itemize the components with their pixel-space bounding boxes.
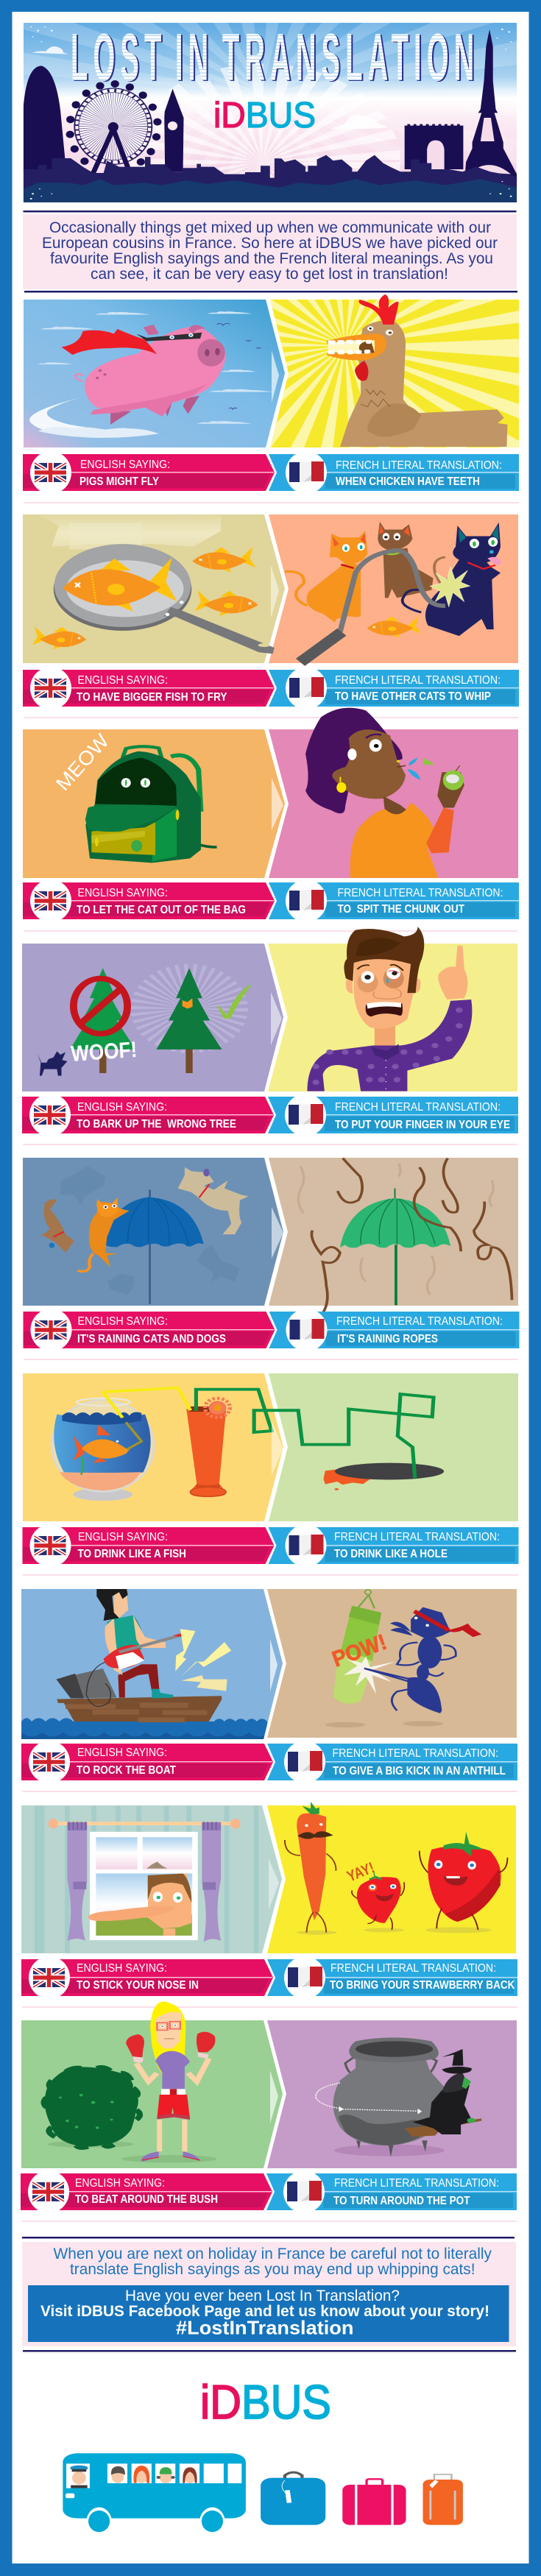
English saying: IT'S RAINING CATS AND DOGS: [77, 1333, 226, 1345]
title: LOST IN TRANSLATION: [71, 20, 479, 95]
English label: ENGLISH SAYING:: [77, 1747, 167, 1759]
French label: FRENCH LITERAL TRANSLATION:: [330, 1962, 496, 1975]
English saying: TO DRINK LIKE A FISH: [78, 1548, 186, 1560]
barking dog and trees: [38, 968, 250, 1076]
woof text: WOOF!: [70, 1038, 138, 1066]
English label: ENGLISH SAYING:: [78, 674, 168, 687]
bush and boxer: [44, 2001, 217, 2163]
caption 9: [21, 2170, 517, 2213]
caption 8: [21, 1956, 517, 1999]
bendy straw and hole: [196, 1390, 444, 1490]
woman spitting: [305, 708, 464, 878]
intro line 3: favourite English sayings and the French literal meanings. As you: [50, 250, 493, 267]
rule: [24, 291, 517, 293]
English label: ENGLISH SAYING:: [77, 1962, 167, 1975]
flying pig: [29, 311, 273, 438]
left background: [23, 1158, 283, 1306]
facebook text: Visit iDBUS Facebook Page and let us know about your story!: [40, 2303, 489, 2320]
French label: FRENCH LITERAL TRANSLATION:: [336, 1315, 503, 1328]
scene 2: bigger fish to fry: [23, 514, 518, 663]
intro line 4: can see, it can be very easy to get lost in translation!: [91, 266, 448, 283]
caption band with flags: [21, 1956, 517, 1999]
left background: [23, 729, 285, 878]
caption band with flags: [23, 667, 519, 710]
right background: [270, 300, 519, 447]
scene 8: nose and strawberries: [21, 1802, 516, 1953]
caption 3: [23, 880, 519, 922]
question text: Have you ever been Lost In Translation?: [125, 2287, 400, 2304]
iDBUS logo: iDBUS: [213, 96, 316, 135]
French translation: TO TURN AROUND THE POT: [333, 2195, 470, 2207]
French translation: TO PUT YOUR FINGER IN YOUR EYE: [335, 1119, 510, 1131]
divider: [23, 1144, 517, 1145]
icon: orange trolley case: [423, 2474, 463, 2525]
chevron highlight: [271, 992, 282, 1045]
English label: ENGLISH SAYING:: [80, 459, 170, 471]
caption 4: [22, 1094, 518, 1136]
English saying: TO BEAT AROUND THE BUSH: [75, 2193, 218, 2206]
bus and luggage: [63, 2453, 463, 2537]
French translation: TO SPIT THE CHUNK OUT: [337, 903, 464, 916]
French translation: IT'S RAINING ROPES: [337, 1333, 438, 1345]
right background: [267, 2020, 517, 2168]
hashtag: #LostInTranslation: [176, 2317, 353, 2339]
French translation: TO DRINK LIKE A HOLE: [334, 1548, 448, 1560]
right background: [269, 1158, 518, 1306]
footer iDBUS logo: iDBUS: [200, 2375, 331, 2429]
rule: [22, 2237, 515, 2239]
divider: [24, 1359, 518, 1360]
title shadow: LOST IN TRANSLATION: [72, 21, 481, 96]
intro line 2: European cousins in France. So here at iDBUS we have picked our: [42, 235, 498, 252]
left background: [23, 514, 285, 663]
French label: FRENCH LITERAL TRANSLATION:: [335, 1101, 501, 1114]
divider: [24, 502, 519, 503]
left background: [21, 2020, 283, 2168]
header banner: [24, 23, 517, 202]
English saying: TO STICK YOUR NOSE IN: [77, 1979, 199, 1992]
caption band with flags: [23, 451, 519, 494]
left background: [21, 1805, 282, 1953]
umbrella with ropes: [298, 1158, 512, 1312]
caption band with flags: [22, 1524, 518, 1567]
sun rays: [124, 0, 400, 211]
English label: ENGLISH SAYING:: [78, 1531, 168, 1543]
French label: FRENCH LITERAL TRANSLATION:: [334, 1531, 500, 1543]
scene 7: rock the boat: [21, 1576, 517, 1739]
French translation: TO GIVE A BIG KICK IN AN ANTHILL: [333, 1765, 506, 1777]
call to action box: [28, 2285, 509, 2342]
yay text: YAY!: [344, 1859, 377, 1886]
intro line 1: Occasionally things get mixed up when we communicate with our: [49, 219, 491, 236]
scene 3: cat out of the bag: [23, 708, 518, 878]
French label: FRENCH LITERAL TRANSLATION:: [335, 674, 501, 687]
rule: [24, 210, 517, 212]
caption band with flags: [22, 1094, 518, 1136]
French translation: WHEN CHICKEN HAVE TEETH: [336, 475, 480, 488]
divider: [23, 1574, 518, 1576]
glow rays behind tree: [160, 986, 219, 1031]
English label: ENGLISH SAYING:: [75, 2177, 165, 2190]
ant kicking punching bag: [325, 1590, 481, 1727]
English saying: TO HAVE BIGGER FISH TO FRY: [77, 691, 227, 704]
right background: [269, 729, 518, 878]
divider: [21, 2221, 517, 2222]
right background: [269, 1373, 518, 1521]
French label: FRENCH LITERAL TRANSLATION:: [334, 2177, 499, 2190]
umbrella with cats and dogs: [40, 1166, 249, 1304]
caption band with flags: [23, 880, 519, 922]
divider: [22, 2006, 517, 2008]
icon: blue suitcase: [261, 2472, 325, 2525]
caption band with flags: [21, 1741, 517, 1783]
chevron highlight: [272, 1420, 283, 1476]
chevron highlight: [271, 565, 279, 618]
intro text block: [23, 214, 517, 289]
divider: [24, 717, 519, 718]
banner sky: [24, 23, 517, 202]
scene 4: wrong tree: [22, 927, 517, 1091]
English saying: TO LET THE CAT OUT OF THE BAG: [77, 904, 246, 916]
left background: [21, 1589, 283, 1739]
chevron highlight: [270, 1639, 277, 1691]
chicken with teeth: [326, 294, 507, 447]
caption 6: [22, 1524, 518, 1567]
English label: ENGLISH SAYING:: [78, 1315, 168, 1328]
English saying: TO ROCK THE BOAT: [77, 1764, 176, 1777]
left background: [24, 300, 285, 447]
fish bowl and cocktail: [52, 1388, 230, 1501]
scene 5: raining: [23, 1158, 518, 1312]
English label: ENGLISH SAYING:: [77, 1101, 167, 1114]
intro background: [23, 214, 517, 289]
meow text: MEOW: [52, 729, 113, 795]
left background: [23, 1373, 283, 1521]
chevron highlight: [272, 1207, 283, 1259]
closing line 1: When you are next on holiday in France be careful not to literally: [53, 2246, 492, 2262]
window with long nose: [35, 1806, 258, 1953]
right background: [267, 1589, 517, 1738]
scene 6: drink: [23, 1373, 518, 1521]
backpack with cat: [85, 746, 217, 863]
chevron highlight: [269, 1858, 279, 1910]
sea, boat and rocker: [21, 1576, 270, 1739]
rule: [23, 2350, 516, 2352]
English label: ENGLISH SAYING:: [78, 887, 168, 899]
sun rays: [270, 300, 519, 447]
icon: pink suitcase: [342, 2479, 406, 2525]
pow text: POW!: [329, 1630, 390, 1672]
caption band with flags: [24, 1309, 520, 1351]
carrot and strawberries: [285, 1802, 507, 1935]
icon: bus: [63, 2453, 246, 2537]
divider: [22, 1791, 517, 1792]
caption 1: [23, 451, 519, 494]
caption 7: [21, 1741, 517, 1783]
man with finger in eye: [307, 927, 472, 1091]
right background: [269, 514, 518, 663]
three cats and whip: [285, 522, 501, 662]
English saying: PIGS MIGHT FLY: [79, 475, 159, 488]
closing line 2: translate English sayings as you may end up whipping cats!: [70, 2261, 475, 2278]
caption 5: [24, 1309, 520, 1351]
French translation: TO HAVE OTHER CATS TO WHIP: [335, 690, 491, 703]
caption band with flags: [21, 2170, 517, 2213]
scene 9: around the bush: [21, 2001, 517, 2168]
right background: [268, 944, 517, 1091]
French label: FRENCH LITERAL TRANSLATION:: [333, 1747, 498, 1760]
witch and cauldron: [316, 2037, 481, 2157]
left background: [22, 944, 283, 1091]
English saying: TO BARK UP THE WRONG TREE: [77, 1118, 236, 1130]
closing background: [22, 2242, 516, 2346]
closing panel: [22, 2242, 516, 2346]
frying pan and fish: [32, 515, 275, 654]
chevron highlight: [272, 778, 283, 830]
chevron highlight: [272, 350, 279, 403]
scene 1: pigs might fly: [24, 294, 519, 447]
caption 2: [23, 667, 519, 710]
divider: [24, 930, 517, 932]
chevron highlight: [270, 2070, 278, 2123]
French label: FRENCH LITERAL TRANSLATION:: [336, 459, 502, 472]
skyline illustration: [24, 26, 517, 202]
right background: [267, 1805, 516, 1953]
French label: FRENCH LITERAL TRANSLATION:: [337, 887, 503, 899]
